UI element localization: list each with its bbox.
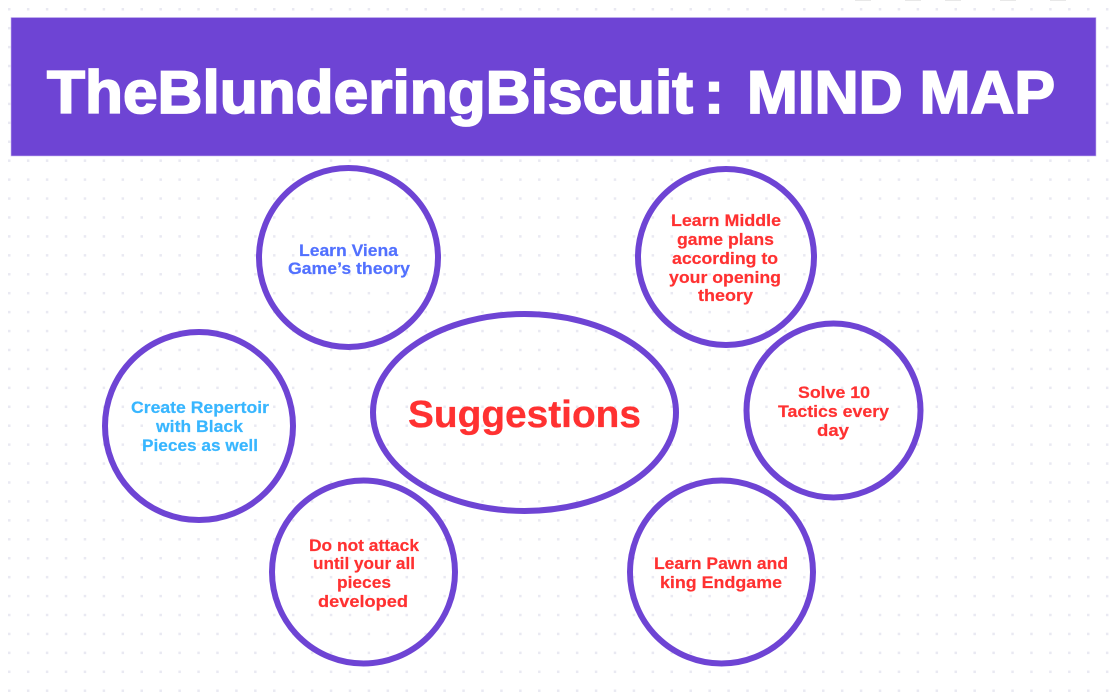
node: Learn Viena Game's theory	[259, 168, 438, 347]
title: TheBlunderingBiscuit	[47, 59, 693, 126]
node: Learn Middle game plans: your opening	[669, 268, 781, 287]
node: Create Repertoir: Create Repertoir	[131, 398, 269, 417]
title: :	[704, 59, 724, 126]
title banner	[11, 18, 1096, 156]
title: MIND MAP	[747, 59, 1055, 126]
node: Learn Middle game plans: game plans	[677, 230, 774, 249]
node: Learn Viena Game's theory: Game’s theory	[288, 259, 411, 278]
title	[47, 59, 1055, 126]
node: Learn Middle game plans: theory	[698, 286, 754, 305]
node: Create Repertoir: with Black	[155, 417, 244, 436]
node: Create Repertoir	[105, 332, 293, 520]
node: Do not attack: developed	[318, 592, 408, 611]
central node: Suggestions	[373, 314, 676, 511]
node: Do not attack: Do not attack	[309, 536, 420, 555]
node: Solve 10 Tactics every day: day	[817, 421, 850, 440]
node: Do not attack: until your all	[313, 554, 415, 573]
node: Learn Middle game plans: according to	[672, 249, 778, 268]
node: Do not attack: pieces	[337, 573, 391, 592]
node: Learn Middle game plans: Learn Middle	[671, 211, 781, 230]
node: Solve 10 Tactics every day: Solve 10	[798, 383, 870, 402]
node: Learn Pawn and king Endgame: Learn Pawn and	[654, 554, 788, 573]
node: Solve 10 Tactics every day: Tactics every	[778, 402, 890, 421]
node: Learn Viena Game's theory: Learn Viena	[299, 241, 399, 260]
node: Learn Middle game plans	[638, 169, 814, 345]
node: Learn Pawn and king Endgame	[630, 480, 813, 664]
node: Create Repertoir: Pieces as well	[142, 436, 258, 455]
node: Learn Pawn and king Endgame: king Endgame	[660, 573, 782, 592]
node: Solve 10 Tactics every day	[746, 324, 920, 498]
node: Do not attack	[272, 480, 455, 664]
central node: Suggestions: Suggestions	[408, 394, 641, 436]
